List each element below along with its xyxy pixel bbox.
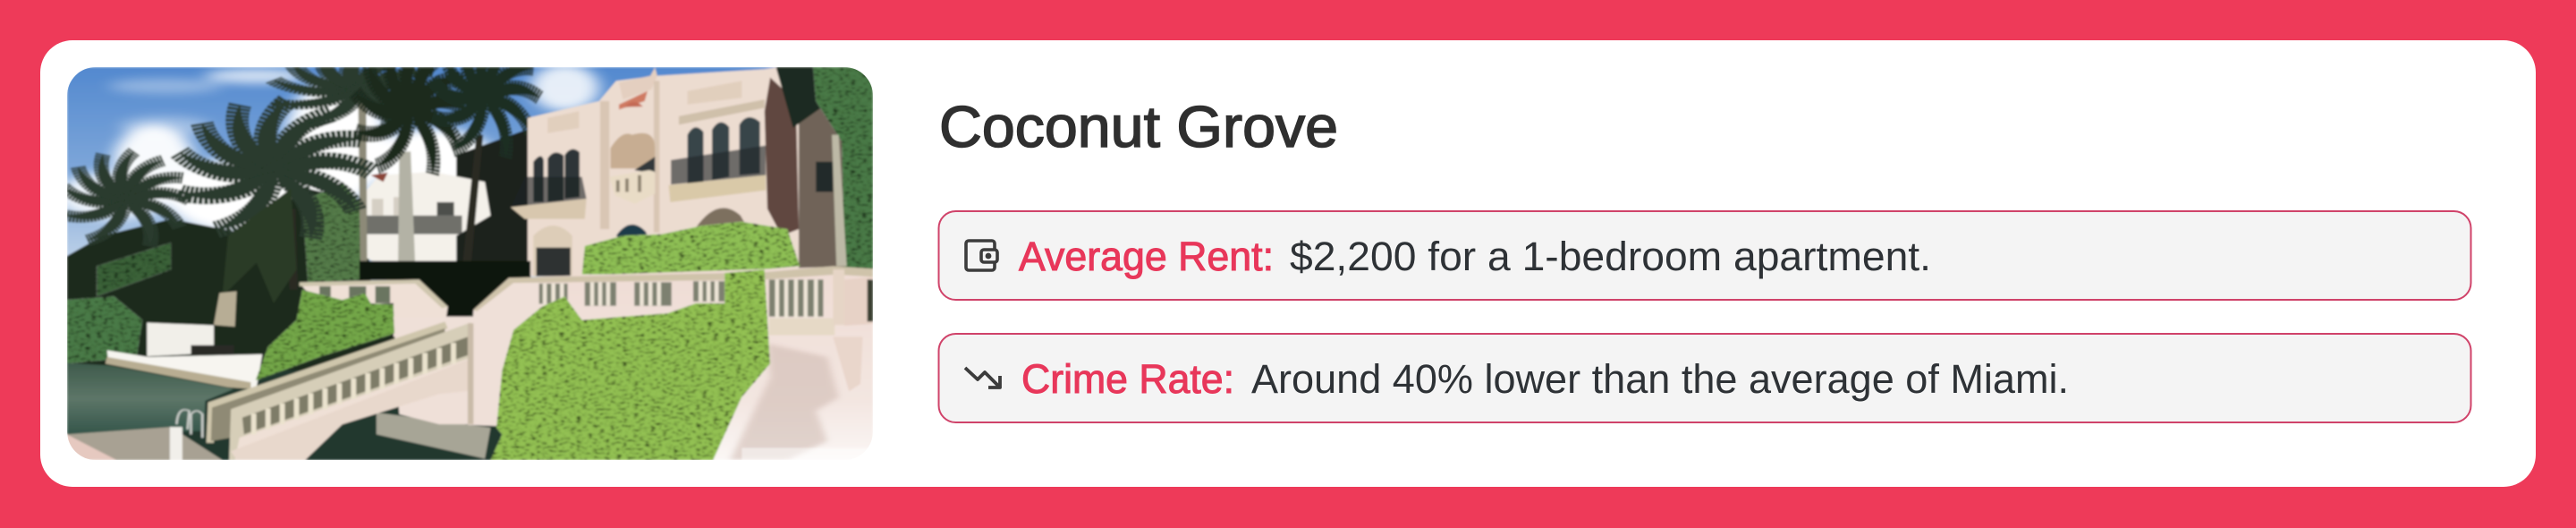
- value: average rent: $2,200 for a 1-bedroom apartment.: [1290, 234, 1931, 279]
- panel: average rent: [939, 211, 2470, 300]
- pavement: [67, 427, 223, 460]
- label: crime rate: Crime Rate:: [1021, 356, 1234, 402]
- trunks: [398, 151, 415, 266]
- panel: crime rate: [939, 334, 2470, 422]
- white villa: [362, 172, 490, 263]
- white patio and dock: [147, 323, 214, 356]
- main ivy: [490, 269, 770, 460]
- left ivy: [256, 290, 394, 380]
- icon: trending down arrow: [965, 368, 1000, 387]
- water: [67, 363, 233, 434]
- lower wall: [394, 317, 473, 424]
- palms: [67, 67, 544, 247]
- right terrace wall: [537, 267, 873, 460]
- fade at lower right: [741, 447, 817, 460]
- shadow on wall: [730, 344, 839, 460]
- concrete seawall: [377, 413, 490, 458]
- vine and right side: [797, 107, 845, 269]
- value: crime rate: Around 40% lower than the average of Miami.: [1251, 356, 2069, 402]
- photo: waterfront mansion with palms: [57, 34, 873, 460]
- mansion shrubs: [582, 222, 800, 275]
- windows: [688, 117, 760, 183]
- main mansion facade: [528, 67, 799, 277]
- dark gap behind stairs: [358, 260, 532, 315]
- dark foliage mass: [67, 189, 530, 370]
- left terrace: [300, 280, 448, 336]
- icon: wallet: [966, 241, 997, 270]
- label: average rent: Average Rent:: [1019, 234, 1274, 279]
- title: Coconut Grove: [939, 94, 1338, 159]
- staircase: [234, 383, 399, 460]
